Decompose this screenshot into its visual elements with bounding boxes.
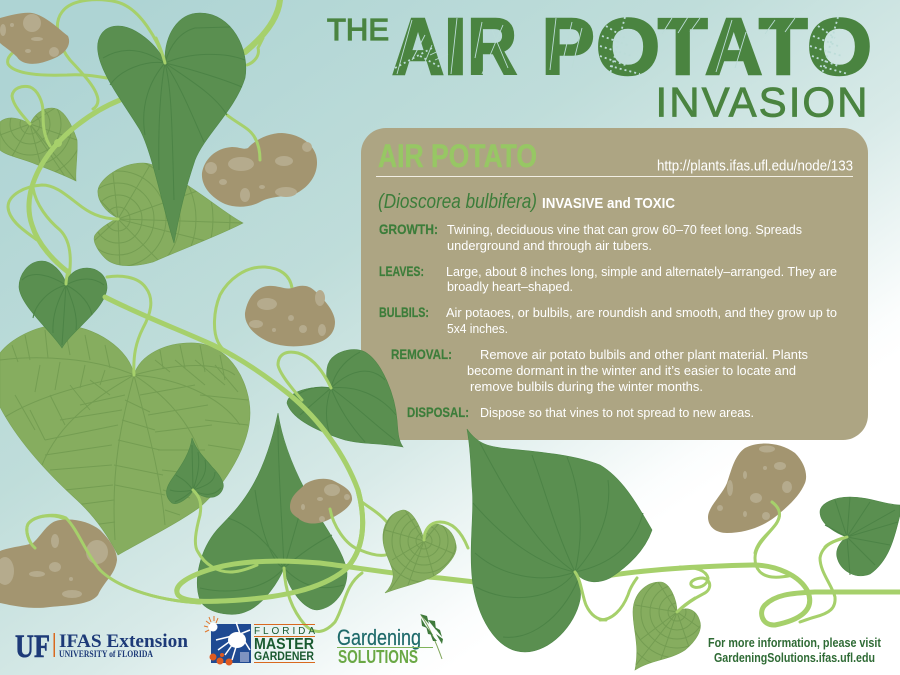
panel heading: AIR POTATO <box>378 138 537 174</box>
title: The Air Potato Invasion: I <box>444 2 467 91</box>
logo: UF IFAS Extension: IFAS Extension <box>59 631 188 652</box>
potato: upper centre <box>202 133 317 207</box>
logo: Gardening Solutions: SOLUTIONS <box>338 647 418 667</box>
title: The Air Potato Invasion: T <box>759 2 808 91</box>
growth entry: Twining, deciduous vine that can grow 60–70 feet long. Spreads <box>447 222 802 237</box>
leaves entry <box>379 263 837 294</box>
logo: Florida Master Gardener: GARDENER <box>254 649 314 663</box>
leaf: dark heart left <box>19 261 107 348</box>
bulbils entry: Air potaoes, or bulbils, are roundish and smooth, and they grow up to <box>446 305 837 320</box>
potato: middle <box>245 286 335 346</box>
title: The Air Potato Invasion: O <box>807 2 872 91</box>
leaf: small light vein centre <box>382 510 457 594</box>
leaf: small light below vine <box>632 582 701 670</box>
disposal entry: DISPOSAL: <box>407 404 469 420</box>
disposal entry: Dispose so that vines to not spread to new areas. <box>480 405 754 420</box>
title: The Air Potato Invasion: R <box>467 2 517 91</box>
removal entry: Remove air potato bulbils and other plant material. Plants <box>480 347 808 362</box>
growth entry: underground and through air tubers. <box>447 238 652 253</box>
leaf: small light top left <box>0 108 78 182</box>
removal entry <box>391 346 808 394</box>
vine: tendril across bottom-left potato <box>27 515 200 603</box>
vine: tendril from small light leaf <box>424 522 637 620</box>
growth entry: GROWTH: <box>379 221 438 237</box>
vine: main stem through centre <box>27 276 475 631</box>
leaf: very large light heart <box>0 325 250 555</box>
logo: Florida Master Gardener <box>204 616 315 666</box>
potato: large bottom left <box>0 519 117 608</box>
leaf: dark right of centre vine <box>287 350 403 447</box>
leaves entry: Large, about 8 inches long, simple and alternately–arranged. They are <box>446 264 837 279</box>
leaf: very large dark bottom centre <box>467 429 652 652</box>
potato: right bottom <box>708 444 806 533</box>
vine: potato six tendril top <box>755 502 779 553</box>
logo: UF IFAS Extension: UNIVERSITY of FLORIDA <box>59 649 153 659</box>
vine: top loop tendril <box>57 0 260 160</box>
logo: UF IFAS Extension <box>15 629 188 665</box>
footer: more information <box>708 636 882 665</box>
scientific name: (Dioscorea bulbifera) <box>378 191 537 213</box>
footer: more information: GardeningSolutions.ifas.ufl.edu <box>714 651 875 665</box>
removal entry: REMOVAL: <box>391 346 452 362</box>
leaf: dark upward pointed <box>197 413 347 614</box>
bulbils entry: 5x4 inches. <box>447 321 508 336</box>
logo: Florida Master Gardener: MASTER <box>254 636 314 653</box>
removal entry: remove bulbils during the winter months. <box>470 379 703 394</box>
logo: UF IFAS Extension: UF <box>15 629 50 665</box>
logo: Florida Master Gardener: FLORIDA <box>254 626 315 637</box>
title: The Air Potato Invasion: THE <box>327 12 389 47</box>
vine: upper stem <box>8 0 280 283</box>
potato: small centre <box>290 479 352 524</box>
invasive and toxic: INVASIVE and TOXIC <box>542 195 675 212</box>
title: The Air Potato Invasion: O <box>596 2 660 91</box>
leaves entry: broadly heart–shaped. <box>447 279 573 294</box>
panel: air potato facts <box>361 128 868 440</box>
title: The Air Potato Invasion: P <box>542 2 595 91</box>
potato: top left <box>0 13 69 64</box>
title: The Air Potato Invasion: A <box>705 2 762 91</box>
leaf: large dark top <box>98 13 246 243</box>
vine: tendril over upper potato <box>255 138 260 160</box>
title: The Air Potato Invasion: T <box>658 2 708 91</box>
vine: stem right of large leaf <box>600 502 900 625</box>
title: The Air Potato Invasion <box>327 2 872 126</box>
leaf: small dark on light <box>166 438 223 504</box>
bulbils entry <box>379 304 837 336</box>
removal entry: become dormant in the winter and it’s easier to locate and <box>467 363 796 378</box>
leaves entry: LEAVES: <box>379 263 424 279</box>
vine: small potato tendril <box>330 490 395 570</box>
title: The Air Potato Invasion: INVASION <box>656 78 868 126</box>
leaf: large light behind heart <box>94 162 244 266</box>
leaf: dark right edge <box>820 497 900 576</box>
growth entry <box>379 221 802 253</box>
icon: fern frond <box>420 614 443 659</box>
bulbils entry: BULBILS: <box>379 304 429 320</box>
title: The Air Potato Invasion: A <box>392 2 444 91</box>
vine: potato 3 tendril <box>214 267 292 357</box>
logo: Gardening Solutions: Gardening <box>337 625 421 650</box>
source link: http://plants.ifas.ufl.edu/node/133 <box>657 158 853 174</box>
logo: Gardening Solutions <box>337 614 443 667</box>
